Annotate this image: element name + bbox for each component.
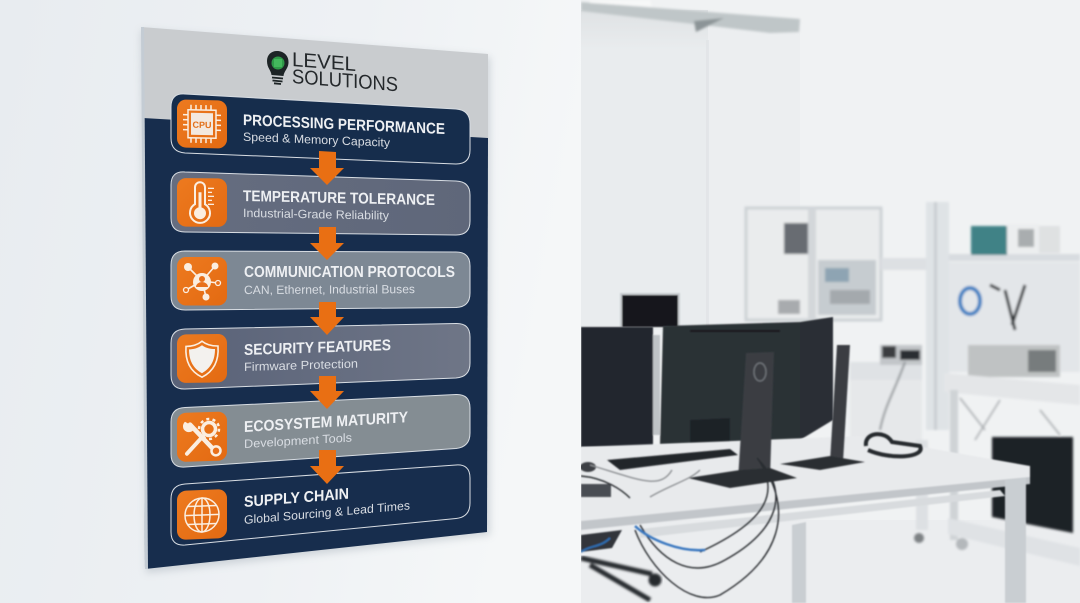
card: temperature tolerance — [171, 172, 470, 235]
text: temperature tolerance: Industrial-Grade Reliability — [243, 206, 389, 223]
arrow 2 — [310, 227, 344, 260]
right workbench with instruments — [914, 202, 1080, 566]
lab equipment rack — [746, 208, 931, 450]
card: communication protocols — [171, 251, 470, 310]
text: temperature tolerance: TEMPERATURE TOLERANCE — [243, 188, 435, 209]
desk — [581, 436, 1030, 603]
text: supply chain: Global Sourcing & Lead Times — [244, 498, 410, 527]
back monitor — [620, 293, 680, 327]
ceiling pipe — [581, 0, 800, 33]
text: processing performance: PROCESSING PERFORMANCE — [243, 112, 445, 138]
logo bulb icon — [267, 51, 289, 84]
background: lab room — [580, 0, 1080, 603]
monitors — [581, 317, 833, 447]
arrow 4 — [310, 376, 344, 409]
arrow 5 — [310, 450, 344, 484]
text: security features: SECURITY FEATURES — [244, 337, 391, 359]
icon: shield — [177, 334, 227, 383]
card: supply chain — [171, 465, 470, 545]
text: security features — [244, 337, 391, 374]
card: ecosystem maturity — [171, 394, 470, 467]
text: ecosystem maturity: ECOSYSTEM MATURITY — [244, 409, 409, 436]
poster shadow — [141, 30, 490, 573]
arrow 1 — [310, 151, 344, 185]
text: ecosystem maturity — [244, 409, 409, 451]
text: security features: Firmware Protection — [244, 357, 358, 374]
poster navy body — [143, 118, 488, 569]
text: communication protocols: COMMUNICATION PROTOCOLS — [244, 264, 455, 281]
card: processing performance — [171, 94, 470, 164]
icon: wrench, screwdriver and gear — [177, 412, 227, 462]
text: supply chain — [244, 486, 410, 527]
arrow 3 — [310, 302, 344, 335]
icon: globe — [177, 489, 227, 540]
office chair base — [581, 558, 659, 600]
icon: thermometer — [177, 178, 227, 227]
logo — [267, 49, 398, 96]
logo wordmark: LEVEL — [292, 49, 356, 76]
logo: SOLUTIONS — [292, 66, 398, 96]
desk items: keyboard, stands, headphones, cables — [580, 345, 921, 598]
text: ecosystem maturity: Development Tools — [244, 431, 352, 451]
poster — [141, 27, 488, 569]
icon: cpu chip: CPU — [192, 120, 212, 130]
card: security features — [171, 323, 470, 389]
icon: network nodes — [177, 257, 227, 306]
wall — [0, 0, 581, 603]
text: communication protocols: CAN, Ethernet, Industrial Buses — [244, 282, 415, 297]
text: temperature tolerance — [243, 188, 435, 223]
text: supply chain: SUPPLY CHAIN — [244, 486, 349, 511]
text: processing performance: Speed & Memory Capacity — [243, 130, 390, 150]
text: processing performance — [243, 112, 445, 150]
poster header band — [141, 27, 488, 138]
icon: cpu chip — [177, 100, 227, 148]
text: communication protocols — [244, 264, 455, 297]
